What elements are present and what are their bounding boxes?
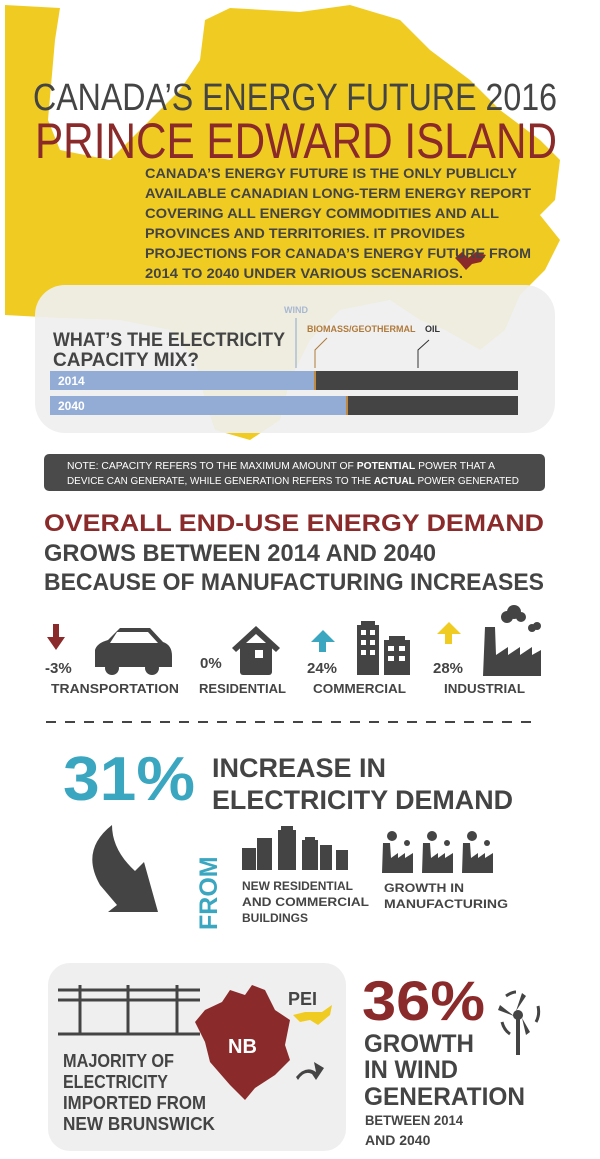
stat: 36% wind growth: GROWTH	[364, 1030, 474, 1058]
sector: commercial: 24%	[307, 660, 337, 677]
text: buildings label: NEW RESIDENTIAL	[242, 879, 353, 893]
heading: end-use demand: BECAUSE OF MANUFACTURING INCREASES	[44, 569, 544, 596]
text: majority imported	[63, 1051, 215, 1134]
intro paragraph: PROVINCES AND TERRITORIES. IT PROVIDES	[145, 225, 465, 241]
heading: capacity mix: WHAT’S THE ELECTRICITY	[53, 330, 285, 351]
sector: residential: RESIDENTIAL	[199, 681, 286, 696]
text: increase in electricity demand: ELECTRICITY DEMAND	[212, 785, 513, 815]
text: increase in electricity demand	[212, 753, 513, 815]
sector: industrial	[433, 605, 541, 696]
stat: 36% wind growth: AND 2040	[365, 1132, 431, 1148]
bar: 2040	[50, 396, 518, 415]
text: buildings label: BUILDINGS	[242, 911, 308, 925]
stat: 31%: 31%	[63, 745, 195, 814]
text: majority imported: MAJORITY OF	[63, 1051, 174, 1071]
legend labels: WIND	[284, 305, 308, 315]
panel: imports from New Brunswick	[48, 963, 346, 1151]
heading: end-use demand: OVERALL END-USE ENERGY DEMAND	[44, 510, 544, 537]
map: New Brunswick	[195, 985, 290, 1100]
note box: DEVICE CAN GENERATE, WHILE GENERATION REFERS TO THE ACTUAL POWER GENERATED	[67, 475, 519, 487]
legend labels	[284, 305, 441, 368]
icon: factories	[382, 831, 493, 873]
sector: industrial: INDUSTRIAL	[444, 681, 525, 696]
intro paragraph: COVERING ALL ENERGY COMMODITIES AND ALL	[145, 205, 499, 221]
text: manufacturing label	[384, 881, 508, 911]
text: increase in electricity demand: INCREASE IN	[212, 753, 386, 783]
sector: transportation: -3%	[45, 660, 72, 677]
icon: wind turbine	[498, 992, 539, 1055]
icon: PEI on map	[455, 252, 486, 270]
text: manufacturing label: MANUFACTURING	[384, 897, 508, 911]
sector: industrial: 28%	[433, 660, 463, 677]
text: majority imported: NEW BRUNSWICK	[63, 1114, 215, 1134]
map: eastern Canada background	[5, 5, 560, 440]
map: PEI	[293, 1005, 332, 1025]
panel: electricity capacity mix: CAPACITY MIX?	[53, 350, 199, 371]
sector: residential: 0%	[200, 655, 222, 672]
arrow: small curved	[296, 1062, 324, 1080]
sector: commercial: COMMERCIAL	[313, 681, 406, 696]
note box	[44, 454, 545, 491]
stat: 36% wind growth: BETWEEN 2014	[365, 1112, 463, 1128]
intro paragraph: CANADA’S ENERGY FUTURE IS THE ONLY PUBLICLY	[145, 165, 518, 181]
stat: 36% wind growth: GENERATION	[364, 1083, 525, 1111]
text: buildings label: AND COMMERCIAL	[242, 895, 369, 909]
bar: 2014: 2014	[58, 374, 85, 388]
text: manufacturing label: GROWTH IN	[384, 881, 464, 895]
panel: imports from New Brunswick: PEI	[288, 989, 317, 1009]
legend labels: OIL	[425, 324, 441, 334]
sector: transportation	[45, 624, 179, 696]
text: buildings label	[242, 879, 369, 925]
intro paragraph: 2014 TO 2040 UNDER VARIOUS SCENARIOS.	[145, 265, 463, 281]
legend labels: BIOMASS/GEOTHERMAL	[307, 324, 416, 334]
text: majority imported: IMPORTED FROM	[63, 1093, 206, 1113]
divider	[46, 721, 535, 723]
title	[33, 77, 557, 169]
bar: 2014	[50, 371, 518, 390]
stat: 36% wind growth: IN WIND	[364, 1056, 458, 1084]
sector: residential	[199, 626, 286, 696]
sector: transportation: TRANSPORTATION	[51, 681, 179, 696]
panel: electricity capacity mix	[35, 285, 555, 433]
text: majority imported: ELECTRICITY	[63, 1072, 168, 1092]
intro paragraph: PROJECTIONS FOR CANADA’S ENERGY FUTURE FROM	[145, 245, 531, 261]
heading: end-use demand	[44, 510, 544, 596]
icon: power lines	[58, 985, 200, 1034]
stat: 36% wind growth: 36%	[362, 969, 485, 1032]
heading: end-use demand: GROWS BETWEEN 2014 AND 2040	[44, 540, 436, 567]
intro paragraph: AVAILABLE CANADIAN LONG-TERM ENERGY REPORT	[145, 185, 531, 201]
intro paragraph	[145, 165, 531, 281]
bar: 2040: 2040	[58, 399, 85, 413]
text: FROM vertical: FROM	[195, 856, 223, 930]
arrow: curved	[92, 825, 158, 912]
panel: imports from New Brunswick: NB	[228, 1036, 257, 1058]
stat: 36% wind growth	[362, 969, 525, 1148]
icon: buildings	[242, 826, 348, 870]
sector: commercial	[307, 621, 410, 696]
note box: NOTE: CAPACITY REFERS TO THE MAXIMUM AMOUNT OF POTENTIAL POWER THAT A	[67, 460, 495, 472]
